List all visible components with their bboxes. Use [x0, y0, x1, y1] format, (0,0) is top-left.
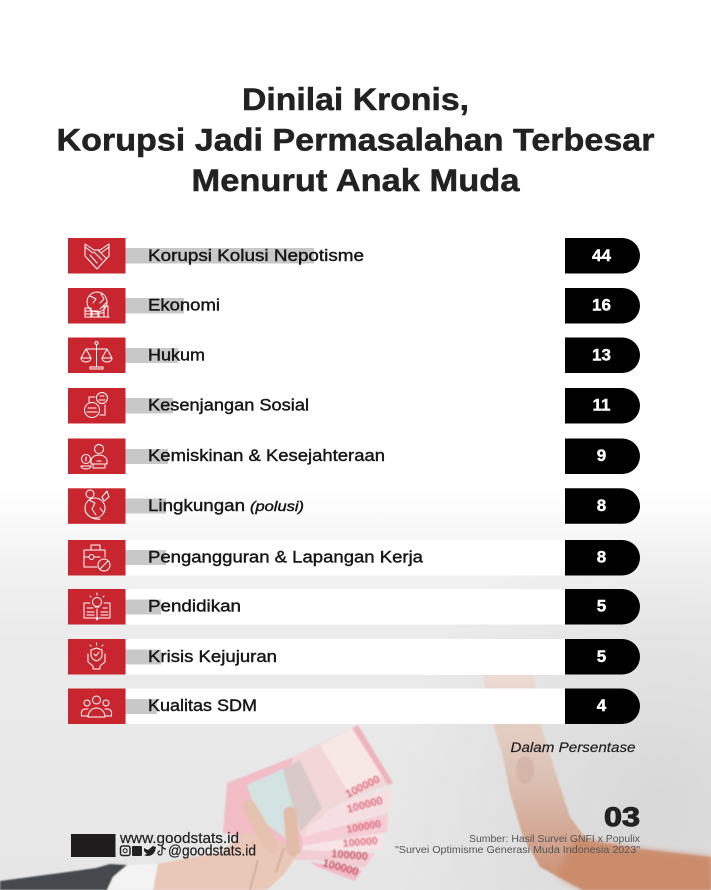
row: Korupsi Kolusi Nepotisme: Korupsi Kolusi Nepotisme — [148, 247, 364, 265]
banknotes: 100000 — [321, 857, 360, 878]
source — [395, 834, 640, 856]
social icons — [120, 846, 166, 856]
icon: briefcase with prohibited sign — [84, 545, 110, 571]
hand — [153, 807, 300, 890]
banknotes: 100000 — [331, 848, 368, 863]
row: Hukum — [68, 338, 640, 373]
row: Kualitas SDM: 4 — [597, 696, 607, 715]
row: Kesenjangan Sosial: 11 — [593, 396, 610, 414]
social media handle: @goodstats.id — [168, 844, 256, 860]
row: Hukum: 13 — [592, 346, 611, 364]
banknotes: 100000 — [346, 795, 384, 816]
social media handle — [120, 844, 256, 860]
photo: hand refusing — [482, 672, 711, 890]
row: Pengangguran dan Lapangan Kerja — [68, 540, 640, 576]
website: www.goodstats.id — [119, 831, 239, 847]
row: Lingkungan: 8 — [597, 496, 606, 515]
icon: social gap — [84, 392, 108, 418]
row: Pendidikan: Pendidikan — [148, 598, 241, 616]
row: Ekonomi: 16 — [592, 296, 611, 314]
icon: group of people — [81, 696, 112, 717]
row: Lingkungan — [68, 488, 640, 524]
row: Krisis Kejujuran — [68, 639, 640, 675]
row: Pengangguran dan Lapangan Kerja: 8 — [597, 548, 606, 566]
row: Kemiskinan dan Kesejahteraan — [68, 438, 640, 474]
row: Korupsi Kolusi Nepotisme: 44 — [592, 246, 611, 265]
row: Lingkungan: (polusi) — [250, 499, 304, 514]
row: Korupsi Kolusi Nepotisme — [68, 238, 640, 274]
title: Korupsi Jadi Permasalahan Terbesar — [56, 122, 654, 158]
shirt cuff — [107, 864, 158, 890]
photo: hand with banknotes — [0, 725, 393, 890]
source: Sumber: Hasil Survei GNFI x Populix — [469, 834, 640, 845]
unit note: Dalam Persentase — [510, 740, 636, 755]
row: Pendidikan: 5 — [597, 596, 606, 616]
banknotes: 100000 — [344, 773, 382, 801]
row: Pengangguran dan Lapangan Kerja: Pengangguran & Lapangan Kerja — [148, 548, 424, 566]
icon: earth and leaf — [85, 490, 109, 519]
icon: handshake — [85, 244, 109, 269]
icon: person and coin — [81, 444, 107, 469]
row: Kesenjangan Sosial — [68, 388, 640, 424]
icon: scales — [81, 342, 112, 369]
source: "Survei Optimisme Generasi Muda Indonesia 2023" — [395, 845, 640, 856]
icon: globe and charts — [85, 292, 109, 317]
row: Kualitas SDM — [68, 688, 640, 724]
title: Dinilai Kronis, — [242, 81, 469, 117]
row: Kemiskinan dan Kesejahteraan: Kemiskinan & Kesejahteraan — [148, 447, 385, 465]
row: Pendidikan — [68, 589, 640, 624]
banknotes: 100000 — [342, 835, 378, 850]
row: Hukum: Hukum — [148, 346, 205, 364]
row: Krisis Kejujuran: 5 — [597, 647, 606, 666]
row: Ekonomi: Ekonomi — [148, 296, 220, 314]
row: Ekonomi — [68, 288, 640, 324]
logo block — [71, 834, 116, 857]
banknotes: 100000 — [345, 818, 382, 836]
title: Menurut Anak Muda — [192, 162, 520, 198]
row: Lingkungan: Lingkungan — [148, 497, 245, 515]
row: Krisis Kejujuran: Krisis Kejujuran — [148, 648, 277, 666]
row: Kesenjangan Sosial: Kesenjangan Sosial — [148, 396, 309, 414]
title — [56, 81, 654, 198]
icon: open book and bulb — [84, 593, 110, 620]
row: Kualitas SDM: Kualitas SDM — [148, 697, 257, 715]
row: Kemiskinan dan Kesejahteraan: 9 — [597, 446, 606, 465]
icon: hands and shield — [88, 643, 105, 669]
page number: 03 — [604, 802, 640, 832]
banknotes — [223, 725, 393, 881]
jacket sleeve — [0, 864, 127, 890]
